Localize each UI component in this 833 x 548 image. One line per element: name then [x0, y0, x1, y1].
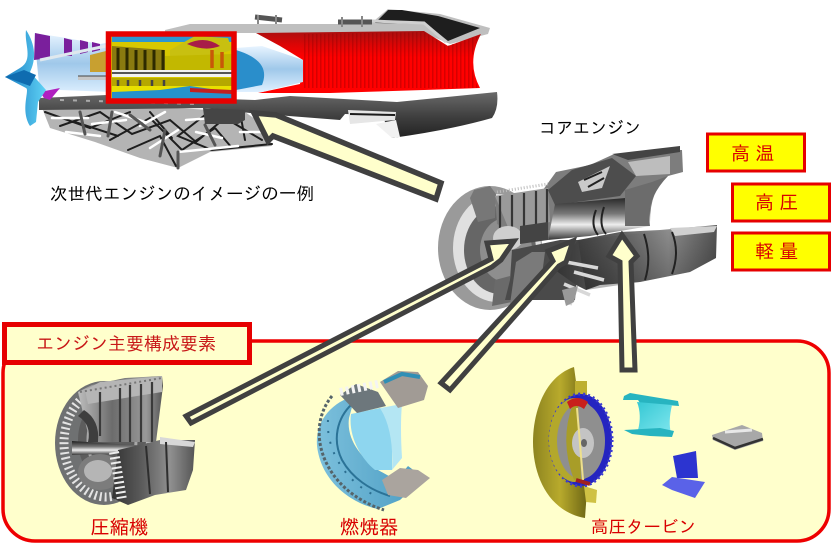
caption: core engine: コアエンジン — [539, 119, 641, 138]
panel: engine main components — [3, 341, 829, 541]
icon: high pressure turbine — [533, 367, 612, 518]
caption: next generation engine: 次世代エンジンのイメージの一例 — [50, 184, 314, 204]
heading: engine main components — [4, 324, 250, 362]
accessories under the engine — [42, 104, 272, 168]
arrow: combustor to core engine — [441, 241, 573, 390]
callout: red frame — [108, 34, 234, 101]
arrow: turbine to core engine — [609, 235, 637, 370]
label: high pressure turbine: 高圧タービン — [591, 517, 696, 537]
badge: lightweight — [732, 233, 830, 270]
lower cowl — [39, 92, 497, 138]
core engine illustration — [438, 146, 717, 310]
core detail in red frame — [108, 34, 236, 102]
label: combustor: 燃焼器 — [340, 517, 398, 539]
top casing — [165, 9, 490, 44]
heading: engine main components: エンジン主要構成要素 — [36, 334, 216, 354]
red exhaust — [256, 31, 481, 93]
icon: turbine blade — [662, 451, 705, 498]
badge: high pressure — [732, 184, 830, 221]
badge: high pressure: 高 圧 — [755, 193, 798, 214]
icon: turbine vane — [623, 393, 679, 437]
icon: turbine shroud — [712, 425, 763, 450]
icon: combustor — [317, 371, 430, 510]
badge: high temperature — [708, 134, 804, 171]
label: compressor: 圧縮機 — [90, 517, 148, 539]
mid light blue section — [236, 46, 303, 92]
badge: high temperature: 高 温 — [731, 144, 774, 165]
arrow: core engine to next generation engine — [254, 113, 441, 199]
fan section — [34, 33, 112, 94]
next generation engine illustration — [5, 9, 497, 168]
arrow: compressor to core engine — [186, 241, 514, 423]
icon: compressor module — [55, 376, 195, 505]
badge: lightweight: 軽 量 — [755, 241, 798, 263]
